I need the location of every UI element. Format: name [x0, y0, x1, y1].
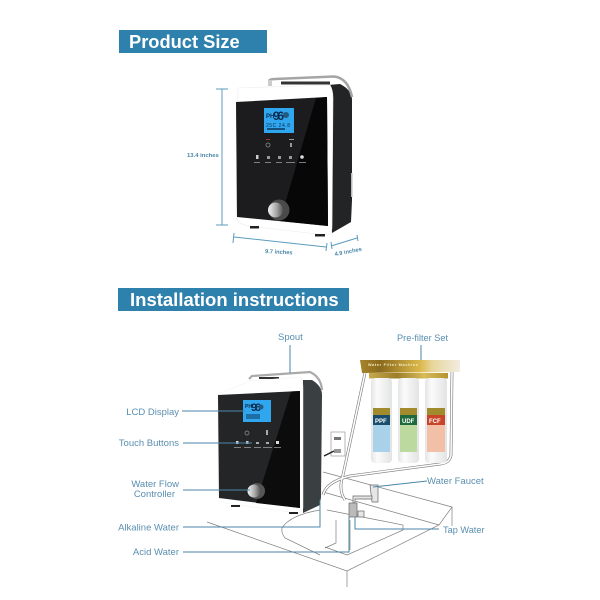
LCD screen: PH: [266, 114, 274, 120]
heading: Installation instructions: Installation instructions: [130, 289, 339, 310]
callout lines: [182, 345, 439, 552]
machine front: [236, 85, 333, 235]
flow knob: [268, 200, 290, 220]
pre-filter set: Water Filter Machine: [368, 363, 418, 367]
LCD screen: 96: [251, 402, 261, 414]
dimension: depth 4.9 inches: [331, 235, 362, 258]
black panel: [236, 97, 328, 226]
knob: [248, 483, 265, 499]
heading: Product Size: [119, 30, 267, 53]
label: Alkaline Water: Alkaline Water: [118, 522, 179, 534]
dimension: depth 4.9 inches: 4.9 inches: [334, 247, 362, 258]
sink and counter line art: [207, 472, 452, 587]
wall outlet: [324, 432, 345, 456]
LCD screen: PH: [245, 404, 252, 410]
dimension: width 9.7 inches: 9.7 inches: [265, 249, 293, 256]
dimension: width 9.7 inches: [233, 233, 327, 256]
bracket: [360, 360, 460, 373]
faucet: [349, 485, 378, 517]
touch buttons: [254, 139, 306, 163]
panel: [218, 391, 300, 508]
UDF filter: UDF: [402, 419, 415, 425]
LCD screen: 96: [273, 109, 284, 123]
heading: Product Size: Product Size: [129, 31, 240, 52]
front body: [218, 377, 303, 513]
FCF filter: FCF: [429, 419, 441, 425]
label: LCD Display: LCD Display: [126, 407, 179, 418]
buttons: [234, 430, 281, 448]
hoses: [323, 372, 452, 500]
LCD screen: [264, 108, 294, 133]
machine spout: [269, 76, 352, 97]
label: Pre-filter Set: Pre-filter Set: [397, 333, 449, 343]
dimension: height 13.4 inches: [187, 89, 228, 225]
label: Water Flow Controller: Water Flow: [131, 479, 179, 490]
product size machine: [236, 76, 352, 236]
label: Water Faucet: Water Faucet: [427, 476, 484, 487]
label: Acid Water: Acid Water: [133, 547, 179, 558]
PPF filter: PPF: [375, 419, 387, 425]
LCD screen: [243, 400, 271, 422]
machine side (installation): [218, 372, 322, 514]
dimension: height 13.4 inches: 13.4 inches: [187, 153, 219, 159]
label: Spout: Spout: [278, 332, 303, 343]
pre-filter set: [360, 360, 460, 463]
label: Touch Buttons: Touch Buttons: [119, 438, 179, 449]
label: Tap Water: Tap Water: [443, 525, 485, 535]
LCD screen: 25C 24.8: [266, 123, 290, 129]
label: Water Flow Controller: Controller: [134, 489, 175, 500]
machine side: [328, 84, 352, 233]
